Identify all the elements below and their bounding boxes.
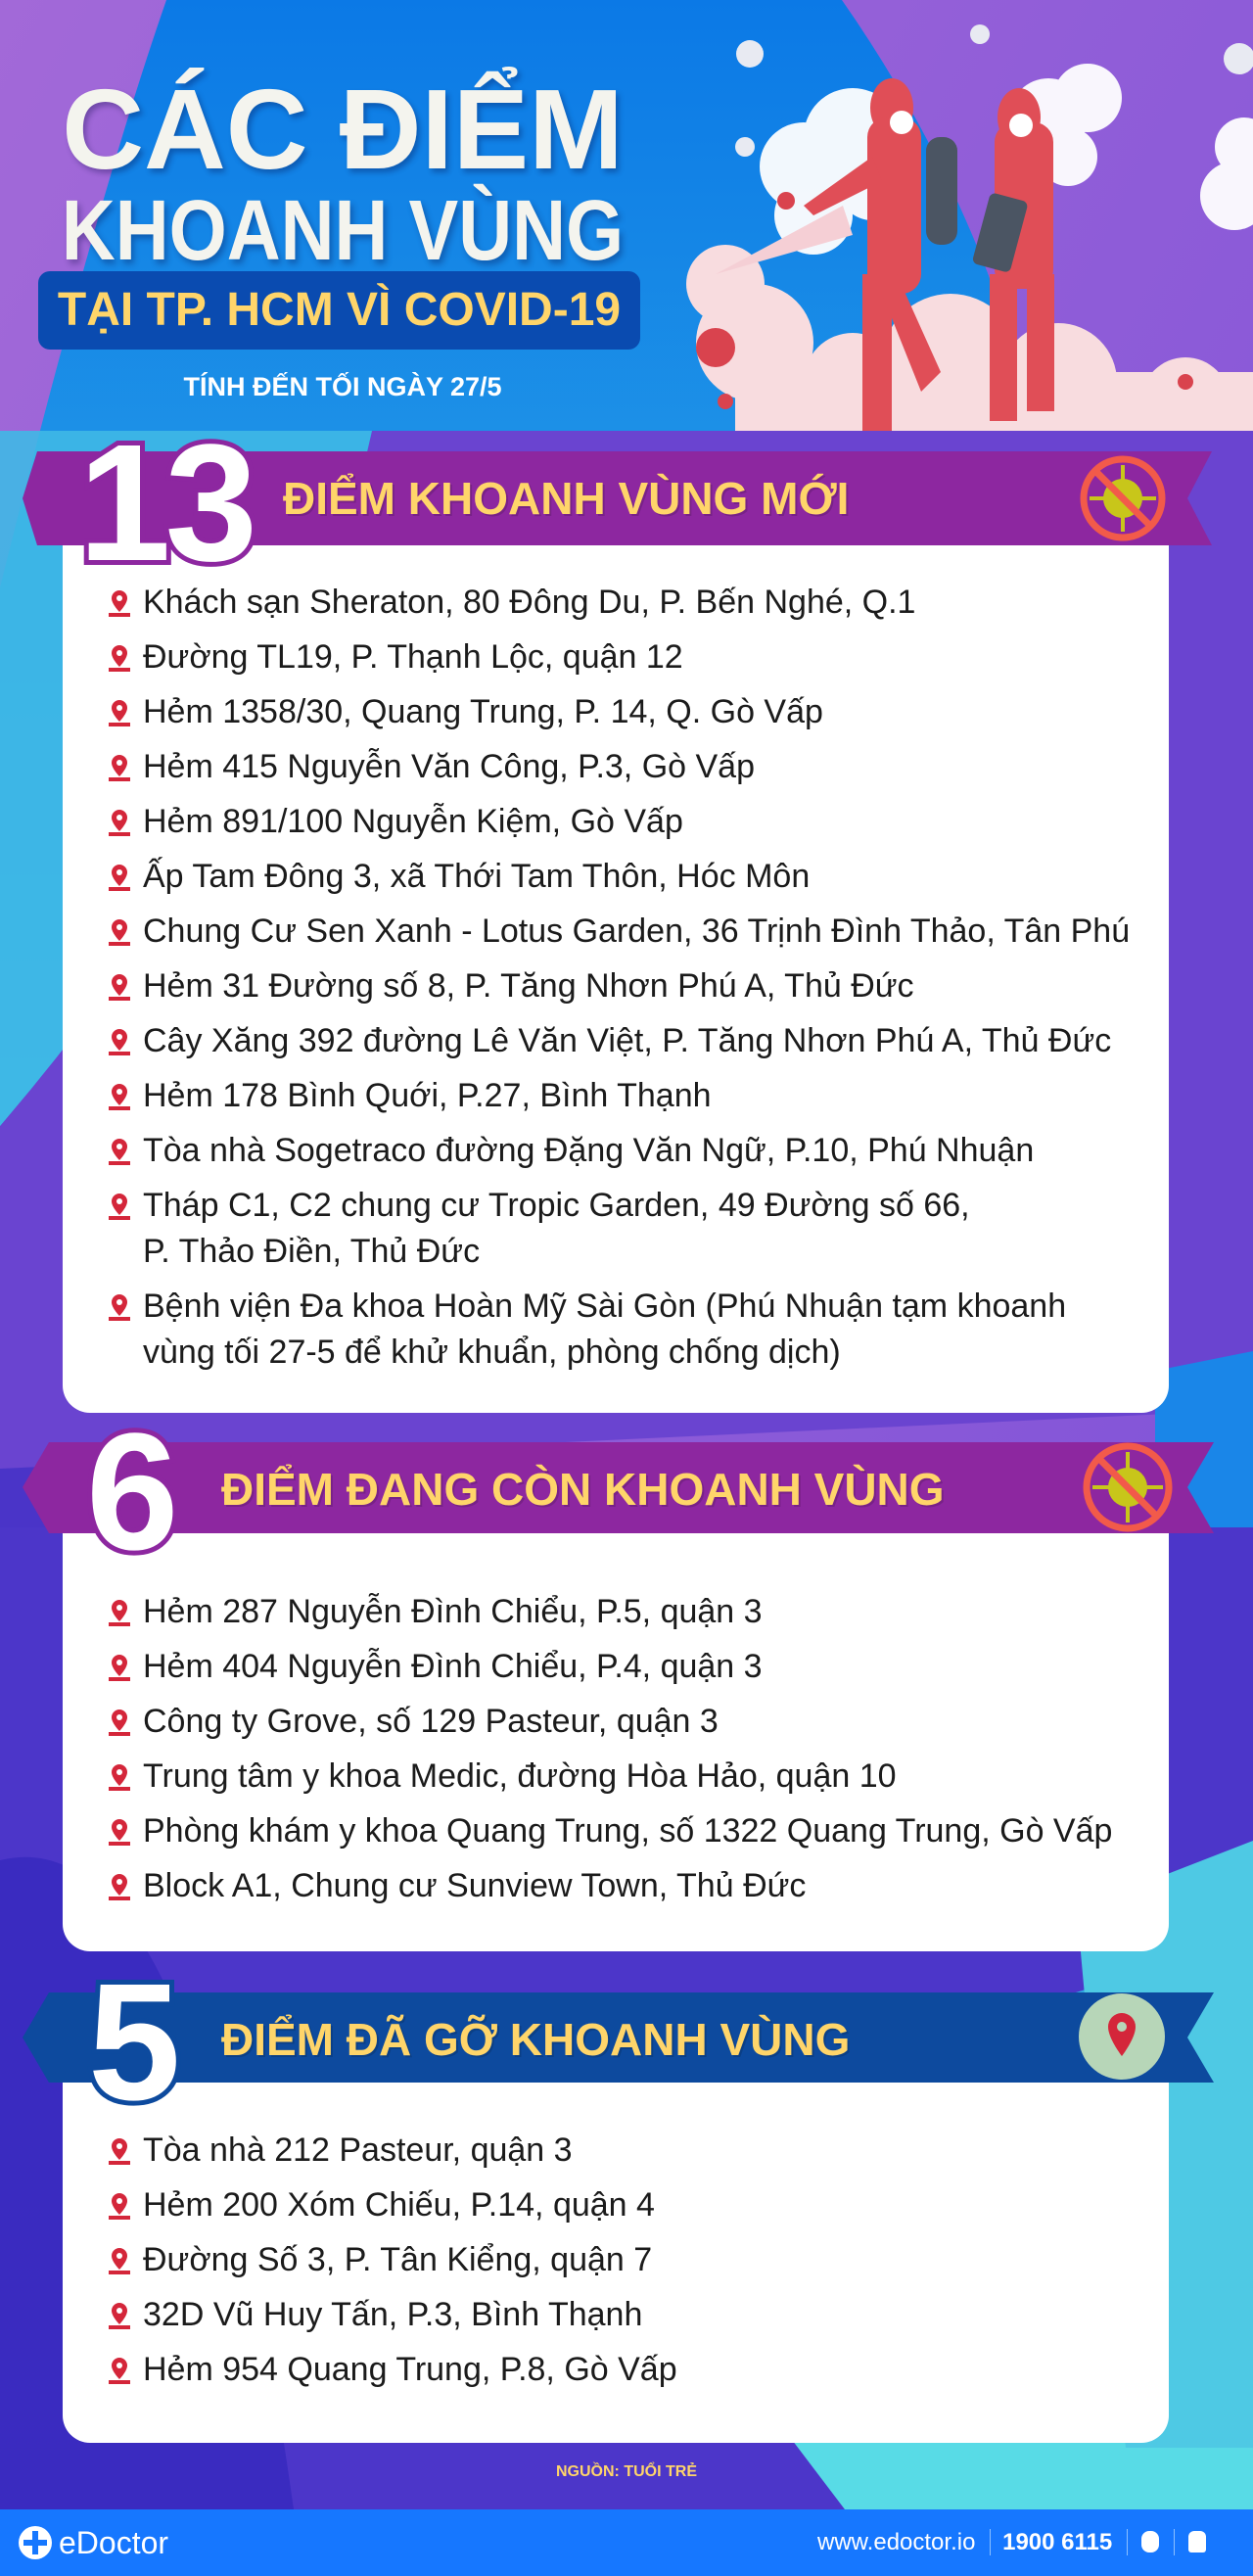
panel: new zones bbox=[63, 545, 1169, 1413]
title bbox=[62, 66, 625, 278]
item list 3 bbox=[109, 2131, 677, 2388]
title: CÁC ĐIỂM bbox=[62, 66, 624, 193]
item list 1: Tòa nhà Sogetraco đường Đặng Văn Ngữ, P.10, Phú Nhuận bbox=[143, 1132, 1034, 1169]
item list 1: Đường TL19, P. Thạnh Lộc, quận 12 bbox=[143, 638, 683, 676]
panel: lifted bbox=[63, 2083, 1169, 2443]
item list 2 bbox=[109, 1593, 1112, 1904]
banner: 13 new zones bbox=[23, 431, 1212, 568]
item list 1: P. Thảo Điền, Thủ Đức bbox=[143, 1233, 480, 1270]
illustration: disinfection workers bbox=[686, 24, 1253, 431]
item list 1: Chung Cư Sen Xanh - Lotus Garden, 36 Trịnh Đình Thảo, Tân Phú bbox=[143, 913, 1130, 950]
contact: www.edoctor.io 1900 6115 bbox=[817, 2529, 1112, 2555]
item list 1: Hẻm 31 Đường số 8, P. Tăng Nhơn Phú A, Thủ Đức bbox=[143, 967, 914, 1005]
banner: 5 lifted bbox=[23, 1970, 1214, 2107]
item list 1: Khách sạn Sheraton, 80 Đông Du, P. Bến Nghé, Q.1 bbox=[143, 584, 915, 621]
source: NGUỒN: TUỔI TRẺ bbox=[556, 2463, 697, 2480]
item list 3: 32D Vũ Huy Tấn, P.3, Bình Thạnh bbox=[143, 2296, 642, 2333]
item list 2: Phòng khám y khoa Quang Trung, số 1322 Quang Trung, Gò Vấp bbox=[143, 1812, 1112, 1850]
item list 1: Bệnh viện Đa khoa Hoàn Mỹ Sài Gòn (Phú Nhuận tạm khoanh bbox=[143, 1288, 1066, 1325]
item list 3: Đường Số 3, P. Tân Kiểng, quận 7 bbox=[143, 2241, 652, 2278]
item list 1: Hẻm 1358/30, Quang Trung, P. 14, Q. Gò Vấp bbox=[143, 693, 823, 730]
item list 2: Trung tâm y khoa Medic, đường Hòa Hảo, quận 10 bbox=[143, 1757, 897, 1795]
footer bbox=[0, 2509, 1253, 2576]
item list 1: Hẻm 178 Bình Quới, P.27, Bình Thạnh bbox=[143, 1077, 712, 1114]
panel: still zoned bbox=[63, 1532, 1169, 1951]
date: TÍNH ĐẾN TỐI NGÀY 27/5 bbox=[183, 372, 502, 401]
banner: 6 still zoned bbox=[23, 1420, 1214, 1557]
item list 2: Block A1, Chung cư Sunview Town, Thủ Đức bbox=[143, 1867, 806, 1904]
item list 2: Hẻm 287 Nguyễn Đình Chiểu, P.5, quận 3 bbox=[143, 1593, 763, 1630]
logo: eDoctor bbox=[59, 2525, 168, 2560]
item list 3: Hẻm 200 Xóm Chiếu, P.14, quận 4 bbox=[143, 2186, 655, 2224]
subtitle box: TẠI TP. HCM VÌ COVID-19 bbox=[58, 284, 621, 336]
item list 1: Ấp Tam Đông 3, xã Thới Tam Thôn, Hóc Môn bbox=[143, 858, 810, 895]
item list 1: Cây Xăng 392 đường Lê Văn Việt, P. Tăng Nhơn Phú A, Thủ Đức bbox=[143, 1022, 1111, 1059]
item list 1 bbox=[109, 584, 1130, 1371]
title: KHOANH VÙNG bbox=[62, 183, 624, 278]
banner title: ĐIỂM KHOANH VÙNG MỚI bbox=[283, 473, 849, 524]
item list 2: Hẻm 404 Nguyễn Đình Chiểu, P.4, quận 3 bbox=[143, 1648, 763, 1685]
item list 3: Tòa nhà 212 Pasteur, quận 3 bbox=[143, 2131, 573, 2169]
item list 2: Công ty Grove, số 129 Pasteur, quận 3 bbox=[143, 1703, 719, 1740]
banner title: ĐIỂM ĐÃ GỠ KHOANH VÙNG bbox=[221, 2014, 850, 2065]
item list 1: Hẻm 415 Nguyễn Văn Công, P.3, Gò Vấp bbox=[143, 748, 755, 785]
item list 1: vùng tối 27-5 để khử khuẩn, phòng chống dịch) bbox=[143, 1334, 841, 1371]
item list 1: Tháp C1, C2 chung cư Tropic Garden, 49 Đường số 66, bbox=[143, 1187, 970, 1224]
item list 3: Hẻm 954 Quang Trung, P.8, Gò Vấp bbox=[143, 2351, 677, 2388]
banner title: ĐIỂM ĐANG CÒN KHOANH VÙNG bbox=[221, 1464, 945, 1515]
icon: no virus bbox=[1087, 1446, 1169, 1528]
icon: no virus bbox=[1084, 459, 1162, 538]
item list 1: Hẻm 891/100 Nguyễn Kiệm, Gò Vấp bbox=[143, 803, 683, 840]
subtitle box bbox=[38, 271, 640, 350]
icon: location pin bbox=[1079, 1993, 1165, 2080]
